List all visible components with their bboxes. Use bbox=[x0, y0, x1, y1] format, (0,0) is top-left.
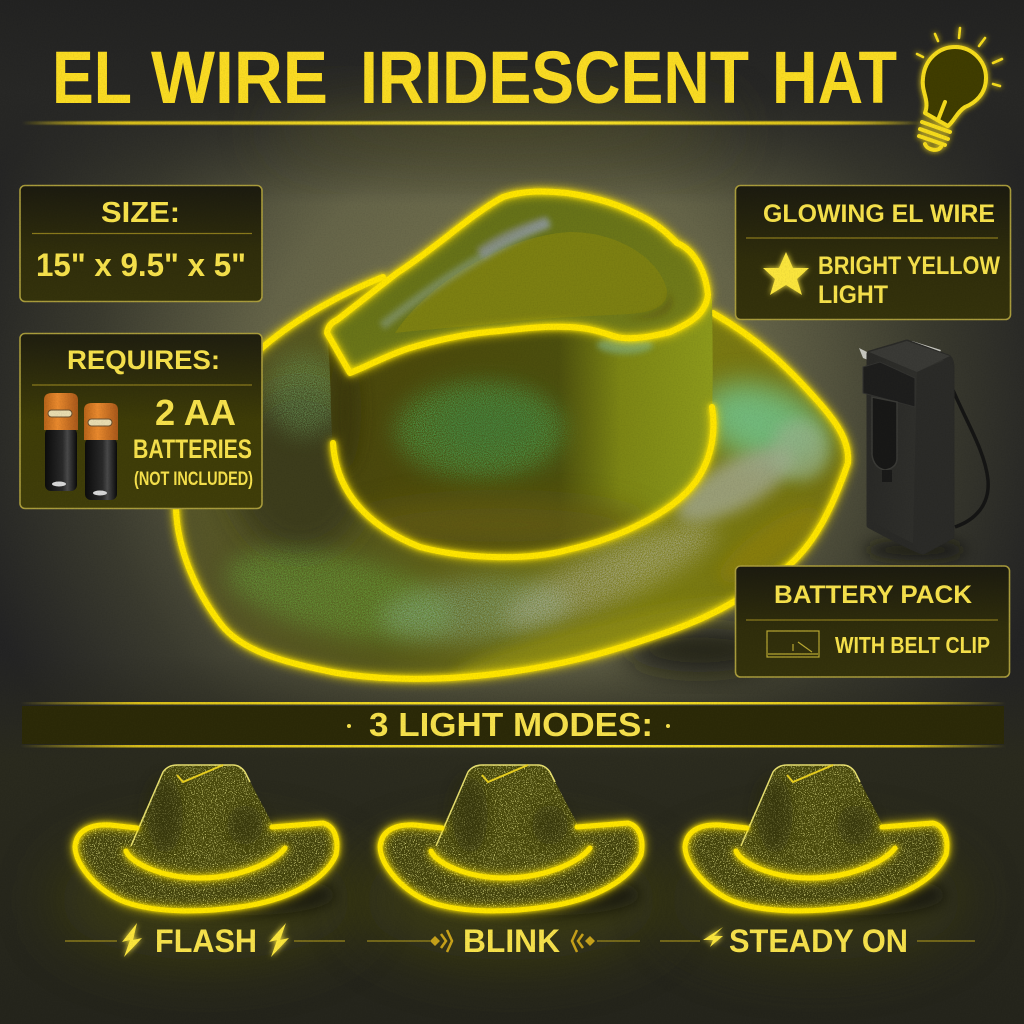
size value: 15" x 9.5" x 5" bbox=[36, 247, 246, 283]
battery pack device bbox=[859, 341, 988, 560]
icon: light bulb bbox=[917, 28, 1002, 150]
mode hat: blink bbox=[380, 765, 642, 915]
icon: battery one bbox=[44, 393, 78, 491]
brim glowing wire bbox=[176, 277, 848, 679]
title: EL bbox=[52, 36, 132, 119]
requires heading: REQUIRES: bbox=[67, 345, 220, 375]
bright yellow text: LIGHT bbox=[818, 281, 888, 309]
icon: belt clip bbox=[767, 631, 819, 657]
pack body bbox=[870, 343, 951, 551]
panel: requires bbox=[20, 334, 262, 508]
belt clip bbox=[863, 362, 915, 407]
title bbox=[52, 36, 897, 119]
power cable bbox=[950, 383, 988, 527]
bright yellow text: BRIGHT YELLOW bbox=[818, 252, 1000, 280]
main hat bbox=[176, 192, 848, 694]
icon: right blink chevrons bbox=[572, 930, 595, 952]
not included note: (NOT INCLUDED) bbox=[134, 469, 253, 490]
mode label: flash: FLASH bbox=[155, 923, 257, 959]
crown wires bbox=[327, 192, 714, 557]
size heading: SIZE: bbox=[101, 197, 180, 229]
icon: left blink chevrons bbox=[430, 930, 452, 952]
title: WIRE bbox=[151, 36, 328, 119]
hat crown bbox=[328, 297, 713, 554]
icon: battery two bbox=[84, 403, 118, 500]
mode label: blink: BLINK bbox=[463, 923, 560, 959]
mode label: flash bbox=[65, 923, 345, 959]
crown top with dent bbox=[327, 192, 708, 373]
bright yellow text bbox=[818, 252, 1000, 309]
icon: right lightning bolt bbox=[269, 923, 289, 957]
mode label: steady on bbox=[660, 923, 975, 959]
battery count: 2 AA bbox=[155, 392, 236, 433]
belt clip label: WITH BELT CLIP bbox=[835, 632, 990, 658]
icon: steady bolt bbox=[703, 927, 723, 947]
title: HAT bbox=[772, 36, 897, 119]
metal prongs bbox=[859, 341, 941, 360]
mode hat: steady on bbox=[685, 765, 947, 915]
panel: battery pack bbox=[736, 566, 1010, 677]
el wire heading: GLOWING EL WIRE bbox=[763, 200, 995, 228]
hat brim bbox=[176, 277, 848, 694]
panel: glowing el wire bbox=[736, 186, 1010, 320]
modes banner bbox=[20, 702, 1006, 748]
icon: star bbox=[763, 252, 809, 295]
hat shadow bbox=[625, 628, 775, 672]
panel: size bbox=[20, 186, 262, 302]
title: IRIDESCENT bbox=[360, 36, 749, 119]
banner heading: 3 LIGHT MODES: bbox=[369, 706, 653, 743]
icon: left lightning bolt bbox=[122, 923, 142, 957]
title rule bbox=[22, 122, 922, 124]
mode hat: flash bbox=[75, 765, 337, 915]
batteries label: BATTERIES bbox=[133, 434, 252, 464]
battery pack heading: BATTERY PACK bbox=[774, 581, 972, 609]
mode label: blink bbox=[367, 923, 640, 959]
mode label: steady on: STEADY ON bbox=[729, 923, 908, 959]
